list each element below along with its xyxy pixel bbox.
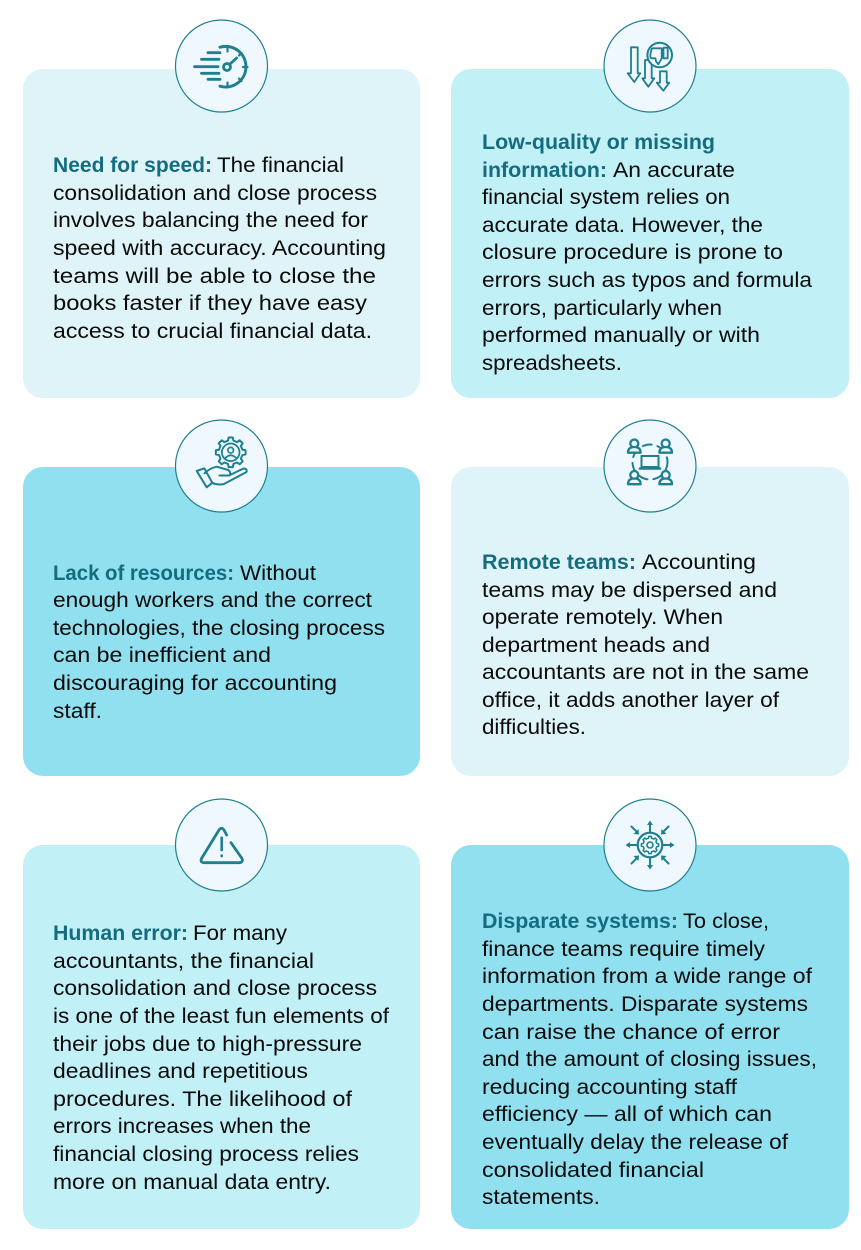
text: need for speed (53, 154, 386, 343)
text: disparate systems: can raise the chance of error (482, 1021, 780, 1044)
text: remote teams: office, it adds another layer of (482, 689, 779, 712)
text: low-quality or missing information: spreadsheets. (482, 352, 622, 375)
text: disparate systems: consolidated financial (482, 1159, 704, 1182)
text: human error: procedures. The likelihood of (53, 1088, 352, 1111)
text: human error: For many (193, 922, 288, 945)
text: disparate systems: information from a wide range of (482, 965, 812, 988)
panel: remote teams (451, 420, 849, 776)
text: lack of resources: technologies, the closing process (53, 617, 385, 640)
icon: hand holding gear (176, 420, 268, 512)
text: human error: more on manual data entry. (53, 1171, 331, 1194)
text: remote teams: teams may be dispersed and (482, 579, 777, 602)
panel: human error (23, 799, 420, 1229)
text: need for speed: The financial (217, 154, 344, 177)
text: low-quality or missing information: performed manually or with (482, 324, 760, 347)
text: remote teams (482, 551, 809, 739)
text: need for speed: Need for speed: (53, 154, 212, 177)
text: remote teams: Accounting (642, 551, 756, 574)
text: human error: financial closing process relies (53, 1143, 359, 1166)
text: need for speed: consolidation and close process (53, 182, 377, 205)
text: need for speed: access to crucial financial data. (53, 320, 372, 343)
text: human error: errors increases when the (53, 1115, 311, 1138)
text: human error: deadlines and repetitious (53, 1060, 308, 1083)
text: remote teams: operate remotely. When (482, 606, 723, 629)
panel: low-quality or missing information (451, 20, 849, 398)
text: low-quality or missing information: errors such as typos and formula (482, 269, 812, 292)
text: disparate systems: reducing accounting staff (482, 1076, 737, 1099)
text: human error: is one of the least fun elements of (53, 1005, 389, 1028)
text: low-quality or missing information: errors, particularly when (482, 297, 722, 320)
panel: lack of resources (23, 420, 420, 776)
text: disparate systems: To close, (683, 910, 769, 933)
text: disparate systems: eventually delay the release of (482, 1131, 788, 1154)
text: low-quality or missing information: accurate data. However, the (482, 214, 763, 237)
icon: down arrows with thumbs down (604, 20, 696, 112)
text: lack of resources: enough workers and the correct (53, 589, 372, 612)
text: need for speed: books faster if they have easy (53, 292, 368, 315)
text: human error (53, 922, 389, 1194)
text: disparate systems: departments. Disparate systems (482, 993, 808, 1016)
text: lack of resources: Without (240, 562, 316, 585)
text: low-quality or missing information: closure procedure is prone to (482, 241, 783, 264)
text: low-quality or missing information: Low-quality or missing (482, 131, 715, 154)
text: lack of resources: Lack of resources: (53, 562, 234, 585)
text: remote teams: department heads and (482, 634, 710, 657)
text: need for speed: involves balancing the need for (53, 209, 368, 232)
text: lack of resources: can be inefficient and (53, 644, 271, 667)
text: disparate systems: Disparate systems: (482, 910, 678, 933)
icon: warning triangle (176, 799, 268, 891)
text: lack of resources: staff. (53, 700, 102, 723)
text: remote teams: accountants are not in the same (482, 661, 809, 684)
text: lack of resources: discouraging for accounting (53, 672, 337, 695)
text: human error: accountants, the financial (53, 950, 314, 973)
icon: team around laptop (604, 420, 696, 512)
text: disparate systems: finance teams require timely (482, 938, 766, 961)
text: low-quality or missing information: information: (482, 159, 607, 182)
text: lack of resources (53, 562, 385, 723)
icon: speedometer (176, 20, 268, 112)
icon detail: four people (628, 440, 672, 484)
text: disparate systems: and the amount of closing issues, (482, 1048, 817, 1071)
text: human error: consolidation and close process (53, 977, 377, 1000)
panel: disparate systems (451, 799, 849, 1229)
text: low-quality or missing information: An accurate (613, 159, 735, 182)
text: need for speed: speed with accuracy. Accounting (53, 237, 386, 260)
text: human error: Human error: (53, 922, 188, 945)
text: low-quality or missing information (482, 131, 812, 375)
text: disparate systems (482, 910, 817, 1209)
text: human error: their jobs due to high-pressure (53, 1033, 362, 1056)
text: disparate systems: statements. (482, 1186, 600, 1209)
text: low-quality or missing information: financial system relies on (482, 186, 730, 209)
icon: gear with radiating arrows (604, 799, 696, 891)
text: disparate systems: efficiency — all of which can (482, 1103, 772, 1126)
text: remote teams: difficulties. (482, 716, 586, 739)
panel: need for speed (23, 20, 420, 398)
text: need for speed: teams will be able to close the (53, 265, 376, 288)
text: remote teams: Remote teams: (482, 551, 636, 574)
